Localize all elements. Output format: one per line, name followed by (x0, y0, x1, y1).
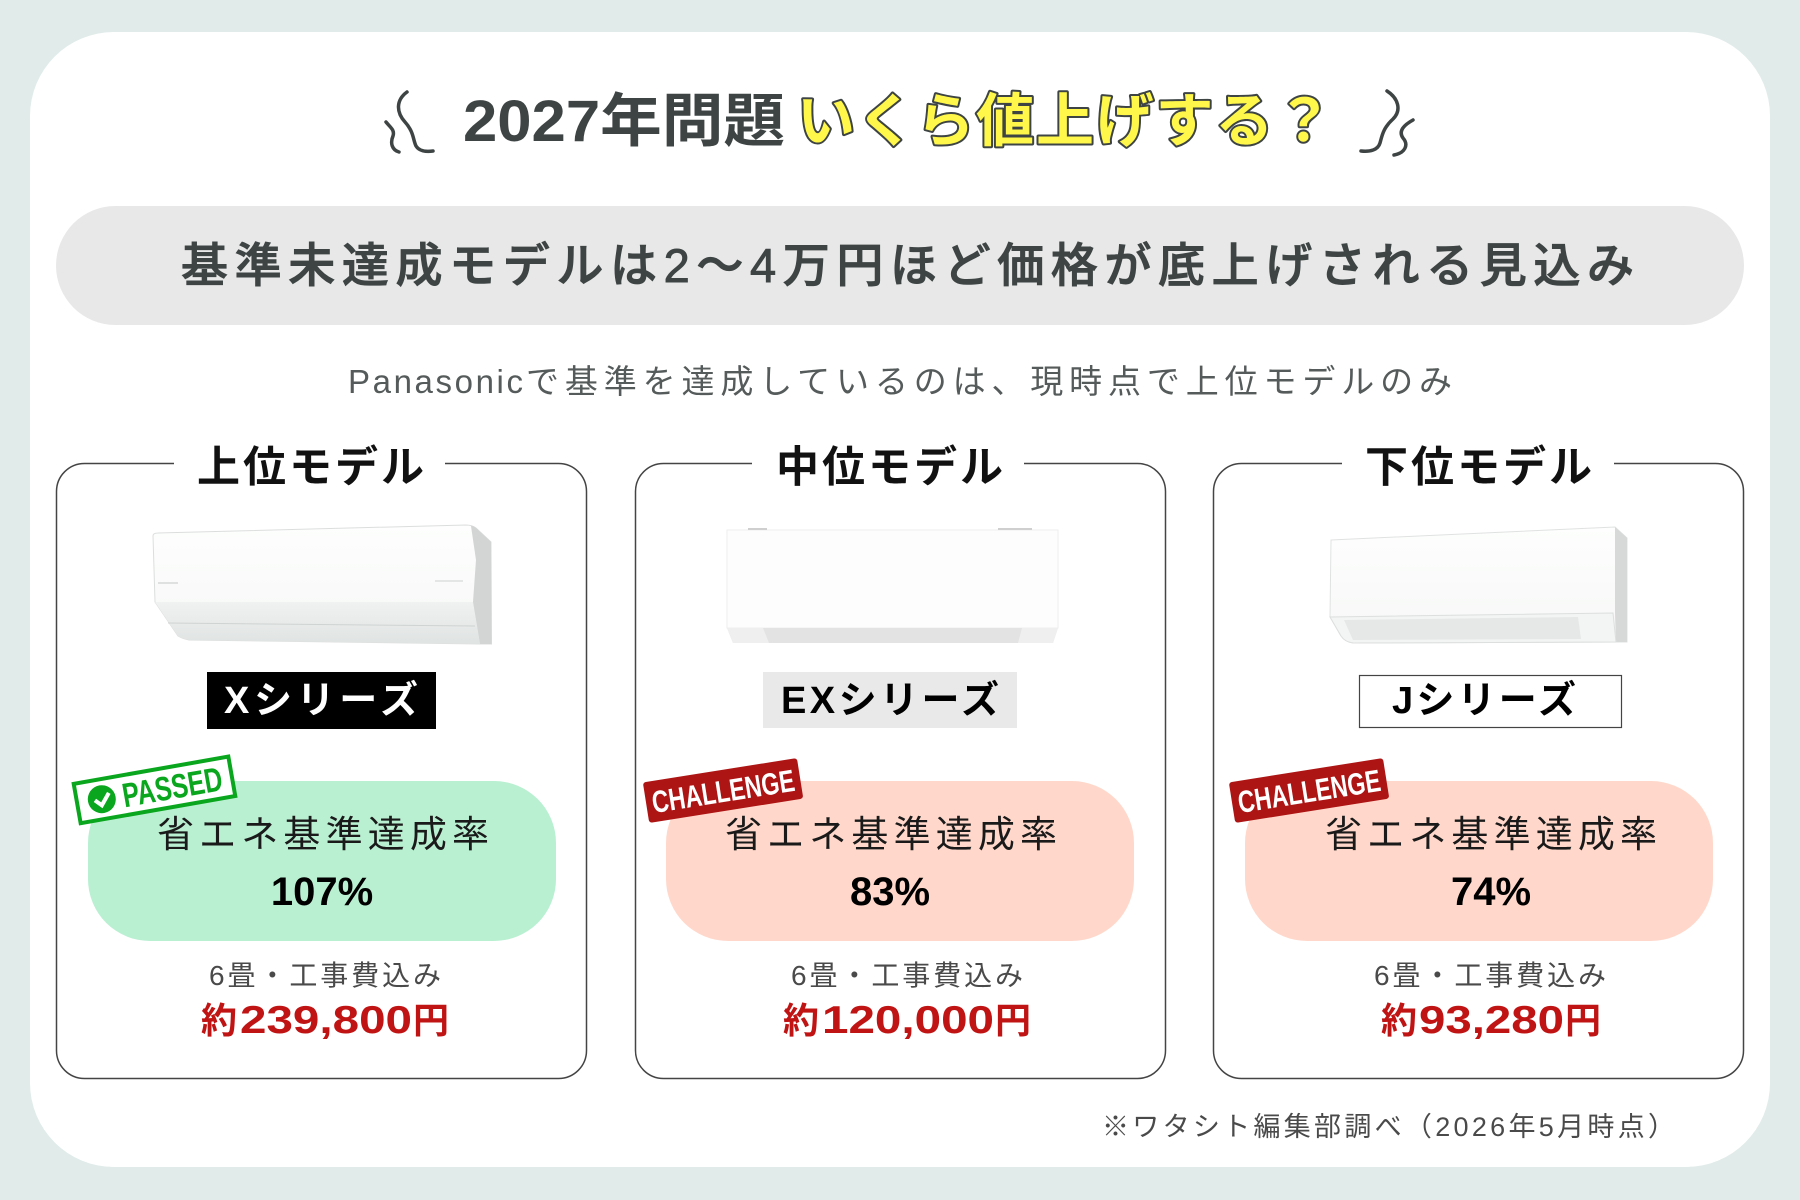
rate pill: challenge (1245, 781, 1713, 941)
price: 93,280 (1419, 999, 1564, 1042)
headline text: 基準未達成モデルは2〜4万円ほど価格が底上げされる見込み (181, 239, 1634, 292)
price: 円 (413, 1000, 449, 1041)
series label: EX (763, 672, 1017, 728)
panel: upper model (56, 443, 586, 1078)
image: EX series air conditioner (727, 528, 1058, 643)
image: J series air conditioner (1330, 527, 1627, 643)
rate pill: challenge (666, 781, 1134, 941)
icon: left squiggles (386, 92, 433, 152)
price: 約 (1381, 1000, 1417, 1041)
rate label: 省エネ基準達成率 (157, 814, 489, 855)
heading: lower model: 下位モデル (1365, 443, 1592, 492)
price: 239,800 (240, 999, 412, 1042)
installation note: 6畳・工事費込み (791, 960, 1023, 991)
subheading: で基準を達成しているのは、現時点で上位モデルのみ (526, 363, 1452, 400)
heading: middle model: 中位モデル (776, 443, 1003, 492)
title (386, 89, 1413, 155)
image: X series air conditioner (153, 525, 492, 644)
series label: X: Xシリーズ (224, 679, 418, 722)
stamp: passed: PASSED (119, 760, 225, 815)
stamp: passed (74, 757, 235, 823)
price: 約 (201, 1000, 237, 1041)
stamp: challenge: CHALLENGE (649, 763, 797, 820)
rate value: 107% (271, 870, 373, 914)
icon: right squiggles (1361, 91, 1413, 155)
installation note: 6畳・工事費込み (1374, 960, 1606, 991)
rate value: 83% (850, 870, 930, 914)
subheading: Panasonic (348, 363, 523, 400)
series label: J: Jシリーズ (1392, 679, 1576, 722)
series label: EX: EXシリーズ (781, 679, 999, 722)
series label: X (207, 672, 436, 729)
price: 円 (1565, 1000, 1601, 1041)
stamp: challenge: CHALLENGE (1235, 763, 1383, 820)
rate label: 省エネ基準達成率 (1325, 814, 1657, 855)
title dark text: 2027年問題 (463, 89, 785, 154)
heading: upper model: 上位モデル (197, 443, 424, 492)
rate pill: passed (88, 781, 556, 941)
price: 円 (995, 1000, 1031, 1041)
footnote: ※ワタシト編集部調べ（2026年5月時点） (1102, 1112, 1675, 1142)
price (1381, 999, 1601, 1042)
panel: lower model (1214, 443, 1744, 1078)
rate value: 74% (1451, 870, 1531, 914)
price: 120,000 (822, 999, 994, 1042)
price (783, 999, 1031, 1042)
price: 約 (783, 1000, 819, 1041)
installation note: 6畳・工事費込み (209, 960, 441, 991)
headline pill (56, 206, 1744, 325)
panel: middle model (636, 443, 1166, 1078)
series label: J (1360, 676, 1622, 728)
price (201, 999, 449, 1042)
title yellow text: いくら値上げする？ (797, 89, 1333, 154)
rate label: 省エネ基準達成率 (725, 814, 1057, 855)
